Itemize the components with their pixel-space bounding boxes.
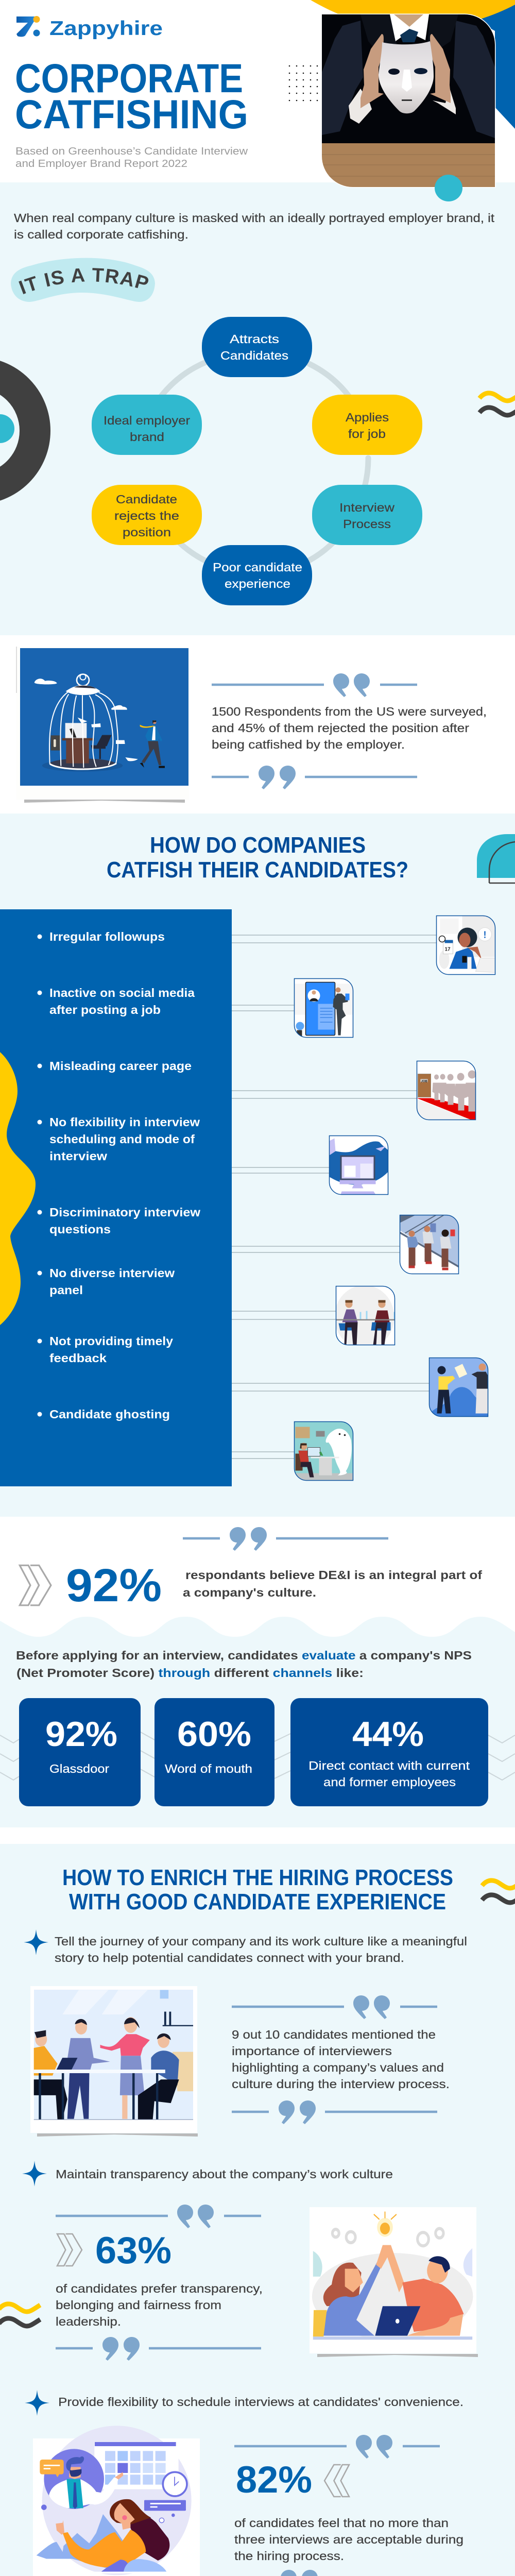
step: ideal employer brand xyxy=(92,395,202,455)
dot pattern xyxy=(289,65,318,101)
text: before applying xyxy=(16,1649,472,1680)
quote opening mark xyxy=(212,673,417,697)
step: applies for job xyxy=(312,395,422,455)
star bullet xyxy=(22,2161,47,2187)
text: before applying: Before applying for an interview, candidates evaluate a company's NPS xyxy=(16,1649,472,1662)
stat card: direct contact: and former employees xyxy=(323,1775,456,1789)
survey text: and 45% of them rejected the position after xyxy=(212,721,469,735)
text: before applying: (Net Promoter Score) through different channels like: xyxy=(16,1666,364,1680)
list item: timely feedback xyxy=(37,1334,173,1365)
stat card: Glassdoor: Glassdoor xyxy=(49,1762,109,1775)
stat text: transparency: of candidates prefer transparency, xyxy=(56,2282,263,2295)
title: CATFISHING xyxy=(15,91,248,137)
quote text: 9 out of 10 xyxy=(232,2028,450,2091)
wave mark: right xyxy=(479,393,515,415)
stat card: word of mouth xyxy=(154,1698,274,1806)
illustration: team around a table xyxy=(30,1986,198,2137)
image card: document handover xyxy=(430,1358,488,1417)
stat card: direct contact xyxy=(290,1698,488,1806)
illustration: scheduling with calendar xyxy=(33,2426,201,2576)
list item: no flexibility: scheduling and mode of xyxy=(49,1132,195,1146)
tip text: transparency: Maintain transparency about the company’s work culture xyxy=(56,2167,393,2181)
yellow blob xyxy=(0,1052,36,1325)
image card: two men at table xyxy=(335,1285,396,1349)
stat card: Glassdoor: 92% xyxy=(45,1715,117,1754)
list item: no flexibility xyxy=(37,1115,200,1163)
quote text: 9 out of 10: 9 out 10 candidates mentioned the xyxy=(232,2028,436,2041)
step: ideal employer brand: brand xyxy=(130,430,164,444)
zigzag behind stat cards xyxy=(0,1732,515,1780)
list item: no diverse panel: panel xyxy=(49,1283,83,1297)
list item: discriminatory questions: questions xyxy=(49,1223,111,1236)
badge: it is a trap: IT IS A TRAP xyxy=(19,268,148,294)
stat card: Glassdoor xyxy=(19,1698,141,1806)
intro text: When real company culture is masked with an ideally portrayed employer brand, it xyxy=(14,211,495,225)
photo: man holding a white mask xyxy=(322,14,495,187)
title xyxy=(15,55,248,137)
list item: misleading career page: Misleading career page xyxy=(49,1059,192,1073)
stat card: word of mouth: Word of mouth xyxy=(165,1762,252,1775)
heading: how to enrich: HOW TO ENRICH THE HIRING PROCESS xyxy=(62,1865,453,1890)
logo: Zappyhire mark and wordmark xyxy=(16,16,163,40)
step: interview process: Interview xyxy=(339,501,394,514)
decorative ring: left xyxy=(0,372,35,489)
step: poor candidate experience xyxy=(202,545,312,605)
list item: no flexibility: interview xyxy=(49,1149,107,1163)
list item: no diverse panel: No diverse interview xyxy=(49,1266,175,1280)
heading: how do companies catfish: HOW DO COMPANIES xyxy=(150,833,366,858)
list item: no flexibility: No flexibility in interview xyxy=(49,1115,200,1129)
step: interview process xyxy=(312,485,422,545)
step: candidate rejects the position: position xyxy=(123,526,171,539)
quote text: 9 out of 10: highlighting a company’s values and xyxy=(232,2061,444,2074)
tip text: flexibility: Provide flexibility to schedule interviews at candidates' convenience. xyxy=(58,2395,464,2409)
quote closing mark xyxy=(234,2570,439,2576)
intro text: is called corporate catfishing. xyxy=(14,228,188,241)
stat text: interviews: three interviews are acceptable during xyxy=(234,2533,464,2546)
image card: recruiter and ghost xyxy=(295,1422,353,1481)
stat: 82%: 82% xyxy=(236,2459,312,2501)
illustration: office inside a cage xyxy=(16,647,189,803)
image card: woman checking phone: ! xyxy=(483,929,486,940)
survey text: 1500 Respondents from the US were surveyed, xyxy=(212,705,487,718)
step: poor candidate experience: experience xyxy=(225,577,290,590)
stat text: DE&I: a company's culture. xyxy=(183,1586,316,1599)
subtitle xyxy=(15,146,248,170)
wave mark: left xyxy=(0,2304,40,2326)
list item: candidate ghosting: Candidate ghosting xyxy=(49,1408,170,1421)
step: interview process: Process xyxy=(343,517,391,531)
step: attracts candidates: Attracts xyxy=(230,332,279,346)
subtitle: and Employer Brand Report 2022 xyxy=(15,158,187,170)
list item: no diverse panel xyxy=(37,1266,175,1297)
quote closing mark xyxy=(183,1527,388,1551)
stat: 63%: 63% xyxy=(95,2230,171,2272)
stat: 92%: 92% xyxy=(66,1560,162,1612)
heading: how to enrich xyxy=(62,1865,453,1914)
teal blob under photo xyxy=(435,175,462,201)
stat text: interviews: of candidates feel that no more than xyxy=(234,2516,449,2530)
stat text: transparency: belonging and fairness from xyxy=(56,2298,221,2312)
step: attracts candidates: Candidates xyxy=(220,349,288,362)
survey text: being catfished by the employer. xyxy=(212,738,405,751)
image card: queue to job door: JOB xyxy=(421,1080,428,1083)
stat text: interviews: the hiring process. xyxy=(234,2549,344,2563)
list item: discriminatory questions: Discriminatory interview xyxy=(49,1206,200,1219)
illustration: high five over laptop xyxy=(310,2207,478,2357)
cycle ring arcs xyxy=(161,362,368,561)
list item: inactive on social media xyxy=(37,986,195,1016)
tip text: tell the journey: Tell the journey of your company and its work culture like a meaningful xyxy=(55,1935,467,1948)
quote closing mark xyxy=(56,2337,261,2361)
stat card: word of mouth: 60% xyxy=(177,1715,251,1754)
step: poor candidate experience: Poor candidate xyxy=(213,561,302,574)
intro text xyxy=(14,211,495,241)
step: applies for job: Applies xyxy=(346,411,389,424)
panel: ways companies catfish xyxy=(0,909,232,1486)
tip text: tell the journey: story to help potential candidates connect with your brand. xyxy=(55,1951,404,1964)
stat text: transparency: leadership. xyxy=(56,2315,121,2328)
stat card: direct contact: 44% xyxy=(352,1715,424,1754)
chevrons icon xyxy=(324,2465,349,2497)
stat text: DE&I: respondants believe DE&I is an integral part of xyxy=(185,1568,482,1582)
image card: woman checking phone: 17 xyxy=(445,947,451,952)
quote closing mark xyxy=(212,766,417,789)
quote text: 9 out of 10: culture during the interview process. xyxy=(232,2077,450,2091)
image card: three professionals xyxy=(400,1215,458,1274)
header decoration: yellow and blue corner shapes xyxy=(311,0,515,129)
image card: woman checking phone xyxy=(437,916,495,975)
title: CORPORATE xyxy=(15,55,243,101)
chevrons icon xyxy=(57,2234,82,2266)
chevrons icon xyxy=(20,1565,51,1605)
image card: phone profile with businessman xyxy=(295,979,353,1038)
image card: monitor on blue wave xyxy=(330,1136,388,1194)
stat card: direct contact: Direct contact with current xyxy=(308,1759,470,1772)
heading: how do companies catfish xyxy=(107,833,408,883)
list item: inactive on social media: Inactive on social media xyxy=(49,986,195,999)
step: attracts candidates xyxy=(202,317,312,377)
list item: timely feedback: Not providing timely xyxy=(49,1334,173,1348)
heading: how to enrich: WITH GOOD CANDIDATE EXPERIENCE xyxy=(69,1889,446,1914)
step: candidate rejects the position: rejects the xyxy=(114,509,179,522)
survey text xyxy=(212,705,487,751)
logo: Zappyhire mark and wordmark: Zappyhire xyxy=(49,18,163,40)
heading: how do companies catfish: CATFISH THEIR CANDIDATES? xyxy=(107,857,408,883)
subtitle: Based on Greenhouse’s Candidate Interview xyxy=(15,146,248,157)
connector lines xyxy=(232,935,436,1459)
quote opening mark xyxy=(56,2205,261,2228)
step: candidate rejects the position: Candidate xyxy=(116,493,177,506)
image card: queue to job door xyxy=(417,1061,478,1120)
tip text: tell the journey xyxy=(55,1935,467,1964)
decorative corner dome xyxy=(477,834,515,883)
stat text: transparency xyxy=(56,2282,263,2328)
list item: timely feedback: feedback xyxy=(49,1351,107,1365)
quote closing mark xyxy=(232,2100,437,2124)
list item: inactive on social media: after posting a job xyxy=(49,1003,161,1016)
quote opening mark xyxy=(232,1995,437,2019)
quote text: 9 out of 10: importance of interviewers xyxy=(232,2044,392,2058)
step: ideal employer brand: Ideal employer xyxy=(104,414,190,427)
step: candidate rejects the position xyxy=(92,485,202,545)
flow diagram: the trap cycle xyxy=(92,317,422,605)
list item: discriminatory questions xyxy=(37,1206,200,1236)
wave mark: right xyxy=(482,1880,515,1903)
list item: irregular followups: Irregular followups xyxy=(49,930,165,943)
stat text: interviews xyxy=(234,2516,464,2563)
step: applies for job: for job xyxy=(348,427,386,440)
stat text: DE&I xyxy=(183,1568,482,1599)
quote opening mark xyxy=(234,2435,440,2459)
star bullet xyxy=(24,1929,48,1955)
star bullet xyxy=(25,2390,49,2416)
